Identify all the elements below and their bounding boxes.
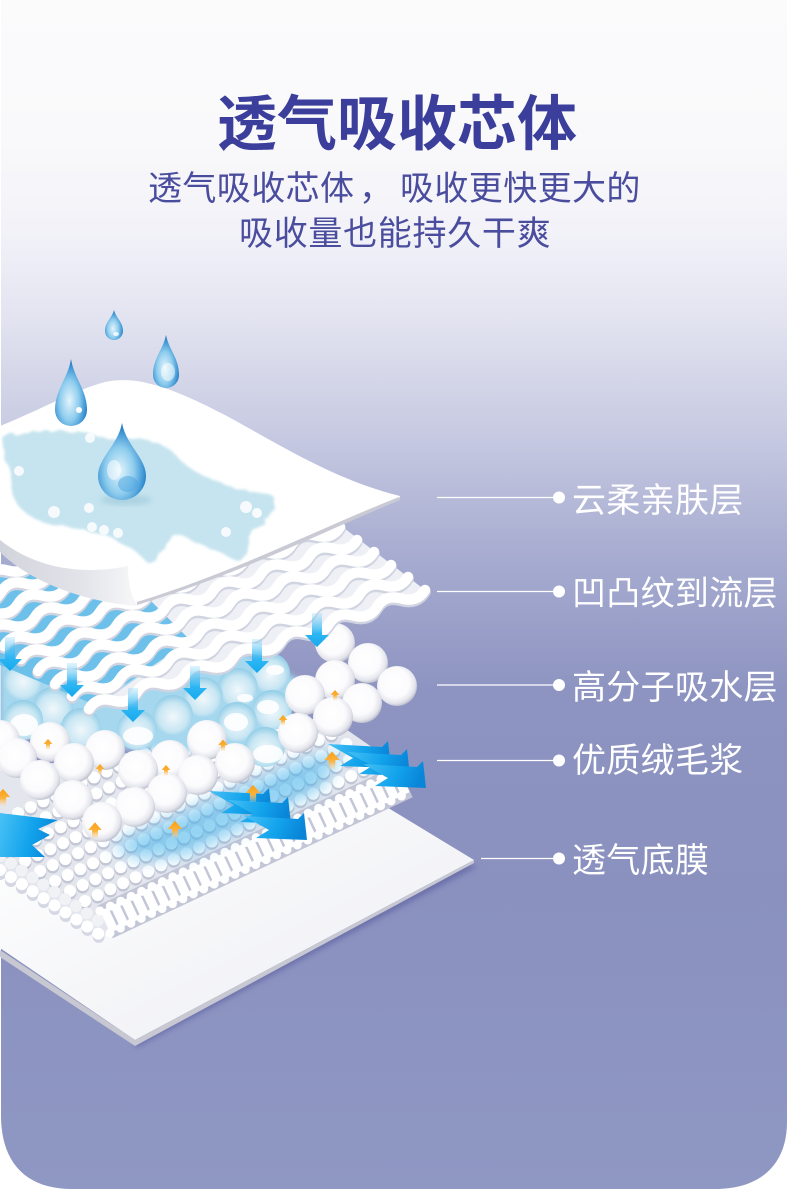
callout: 优质绒毛浆 — [437, 742, 744, 780]
white clouds on wet spheres — [10, 665, 284, 763]
layer: soft top sheet — [0, 380, 400, 606]
subtitle — [148, 170, 641, 253]
wave strands — [0, 477, 425, 709]
subtitle: 透气吸收芯体 — [148, 170, 354, 208]
title: 透气吸收芯体 — [217, 91, 577, 158]
layer: super absorbent polymer spheres — [0, 623, 417, 842]
drop: left — [55, 359, 87, 426]
callout: 凹凸纹到流层: 凹凸纹到流层 — [572, 575, 778, 613]
drop: large centre — [98, 423, 152, 505]
water drops — [55, 310, 179, 505]
blue outward flow arrows — [0, 741, 426, 857]
stain highlights — [14, 433, 262, 538]
blue wet area on fluff — [110, 750, 345, 860]
callout: 云柔亲肤层 — [437, 482, 744, 520]
arrows: right group — [328, 741, 426, 788]
subtitle: 吸收量也能持久干爽 — [239, 215, 551, 253]
callout: 透气底膜: 透气底膜 — [572, 842, 709, 880]
callout: 透气底膜 — [481, 842, 709, 880]
wet spheres, blue — [3, 653, 292, 767]
blue downward arrows — [0, 613, 329, 722]
layered absorbent core illustration — [0, 310, 478, 1048]
callout: 高分子吸水层: 高分子吸水层 — [572, 669, 778, 707]
arrows: left group — [0, 813, 58, 857]
blue wet stain — [2, 430, 274, 561]
layer: embossed diversion waves — [0, 477, 425, 711]
callout: 优质绒毛浆: 优质绒毛浆 — [572, 742, 744, 780]
layer: breathable bottom film — [0, 800, 478, 1048]
layer: fluff pulp — [0, 690, 412, 941]
white spheres — [0, 623, 417, 842]
drop: small top — [105, 310, 123, 340]
arrows: middle group — [209, 788, 307, 840]
callout: 云柔亲肤层: 云柔亲肤层 — [572, 482, 744, 520]
wave shadows — [0, 479, 425, 711]
drop: right — [153, 335, 179, 388]
orange upward arrows, lower — [0, 751, 340, 838]
orange upward arrows, on spheres — [44, 690, 339, 838]
callout: 凹凸纹到流层 — [437, 575, 778, 613]
subtitle: 吸收更快更大的 — [400, 170, 641, 208]
subtitle: ， — [359, 170, 393, 208]
callout: 高分子吸水层 — [437, 669, 778, 707]
